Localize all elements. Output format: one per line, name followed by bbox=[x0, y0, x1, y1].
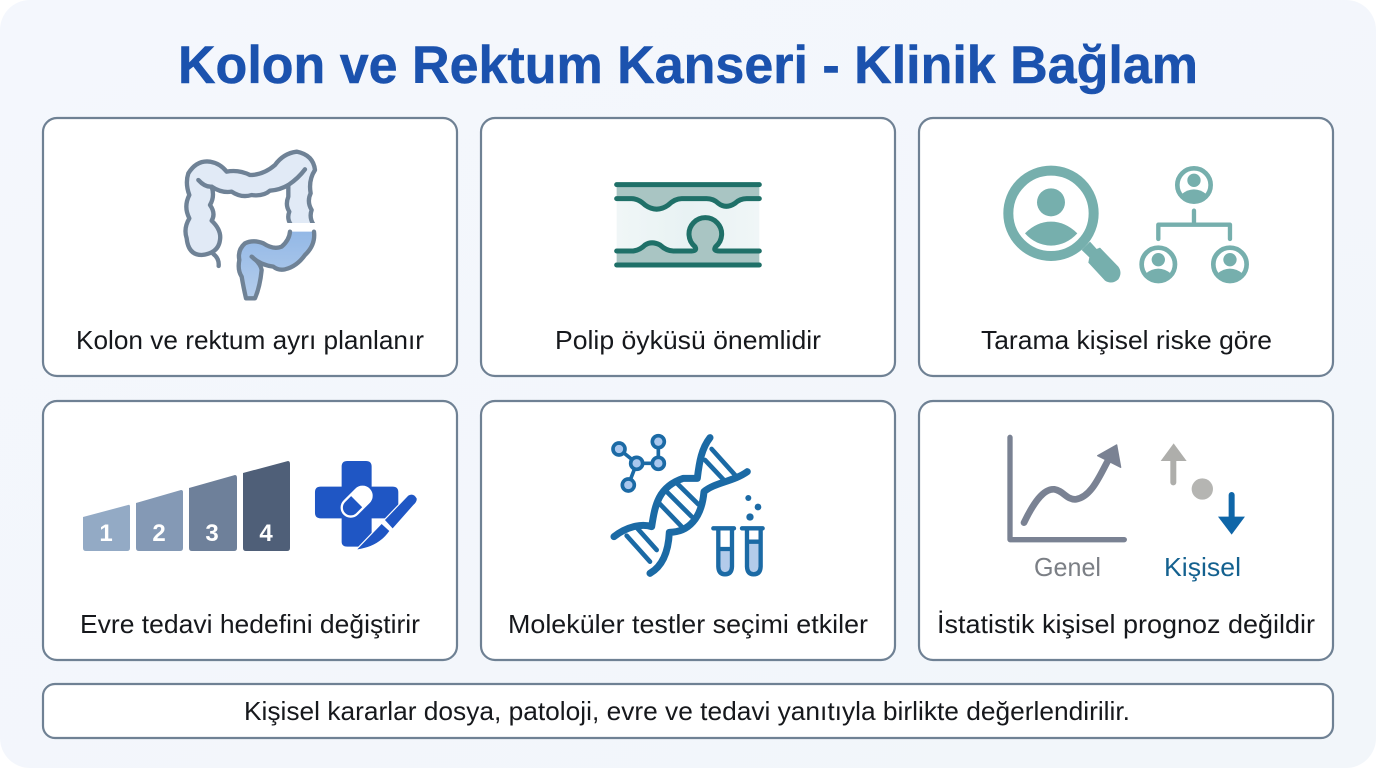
icon: personal arrows bbox=[1161, 443, 1245, 535]
panel: tarama bbox=[919, 118, 1333, 376]
panel: istatistik bbox=[919, 401, 1333, 660]
label: İstatistik kişisel prognoz değildir bbox=[937, 609, 1315, 639]
icon: stage bars 1-4: 3 bbox=[205, 520, 219, 547]
icon: stage bars 1-4: 1 bbox=[99, 520, 113, 547]
label: Polip öyküsü önemlidir bbox=[555, 325, 821, 355]
icon: general trend chart bbox=[1010, 437, 1124, 540]
panel: evre bbox=[43, 401, 457, 660]
panel: moleküler bbox=[481, 401, 895, 660]
icon: stage bars 1-4: 4 bbox=[259, 520, 273, 547]
icon: stage bars 1-4: 2 bbox=[152, 520, 166, 547]
panel: polip bbox=[481, 118, 895, 376]
icon: stage bars 1-4 bbox=[83, 461, 290, 551]
panel: kolon ve rektum bbox=[43, 118, 457, 376]
label: Tarama kişisel riske göre bbox=[981, 325, 1272, 355]
label: genel: Genel bbox=[1034, 552, 1101, 582]
label: Kolon ve rektum ayrı planlanır bbox=[76, 325, 424, 355]
label: kişisel: Kişisel bbox=[1164, 552, 1241, 582]
title: Kolon ve Rektum Kanseri - Klinik Bağlam bbox=[178, 36, 1198, 95]
label: Moleküler testler seçimi etkiler bbox=[508, 609, 868, 639]
icon: polyp in bowel wall bbox=[617, 185, 759, 265]
icon: magnifier and family tree bbox=[1008, 168, 1247, 283]
icon: medical cross, pill and scalpel bbox=[315, 461, 417, 549]
panel: footer note: Kişisel kararlar dosya, patoloji, evre ve tedavi yanıtıyla birlikte değerlendirilir. bbox=[244, 696, 1130, 726]
label: Evre tedavi hedefini değiştirir bbox=[80, 609, 420, 639]
icon: colon and rectum bbox=[185, 152, 317, 298]
icon: DNA, molecule and test tubes bbox=[613, 436, 763, 574]
panel: footer note bbox=[43, 684, 1333, 738]
